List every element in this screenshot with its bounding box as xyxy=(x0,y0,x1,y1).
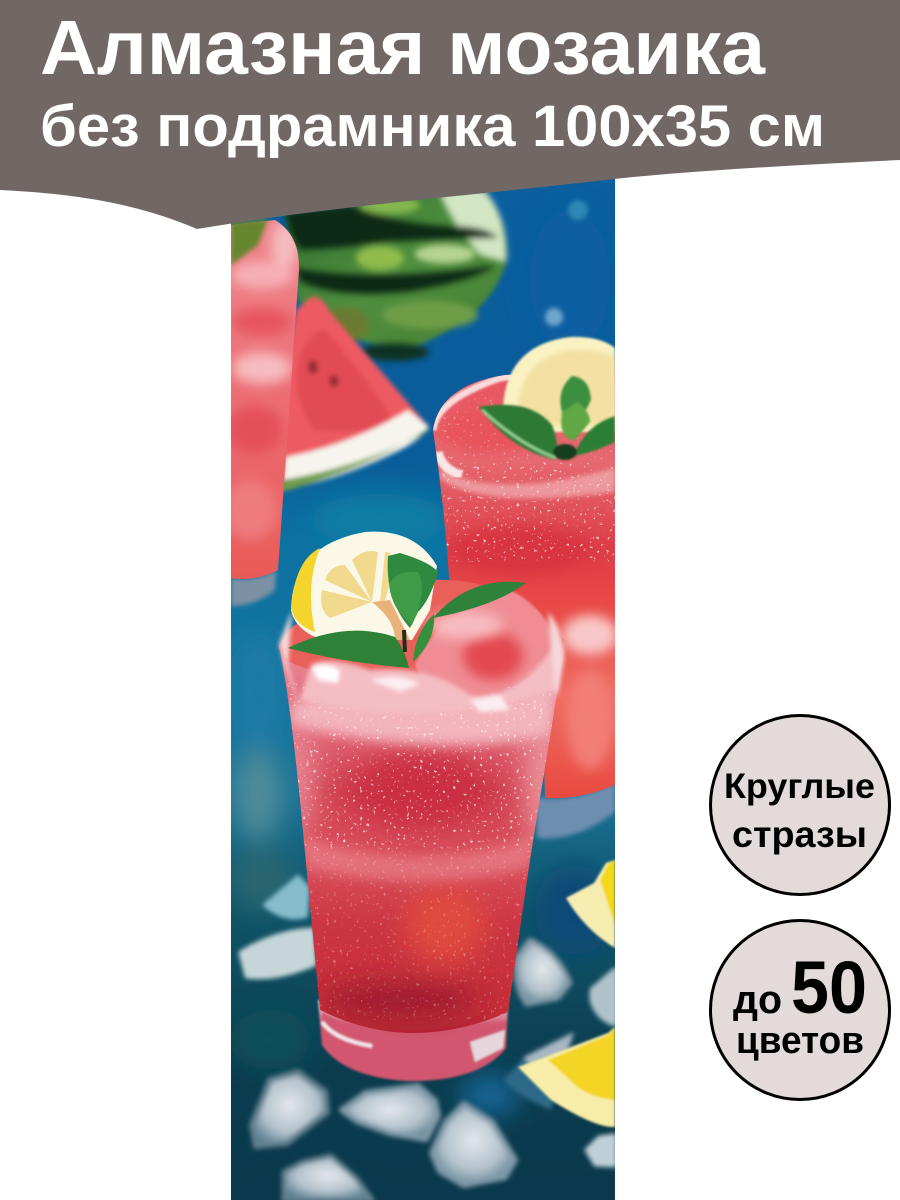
photo background: blue table xyxy=(231,170,615,1200)
left glass xyxy=(231,218,300,609)
whole watermelon xyxy=(285,188,506,361)
ice cubes behind glass xyxy=(241,877,615,1024)
badge: up to 50 colours: до xyxy=(733,978,782,1022)
lemon wedges xyxy=(518,860,615,1127)
title line 1: Алмазная мозаика xyxy=(40,5,766,91)
badge: round rhinestones xyxy=(710,716,890,894)
badge: round rhinestones: Круглые xyxy=(724,767,875,806)
header banner xyxy=(0,0,900,229)
badge: up to 50 colours: 50 xyxy=(791,946,867,1029)
badge: round rhinestones: стразы xyxy=(732,814,867,855)
product photo: watermelon slushie glasses xyxy=(222,170,620,1200)
table colour patches xyxy=(231,488,604,1127)
watermelon slice xyxy=(281,297,429,492)
slush top and frosted rim xyxy=(279,580,564,713)
main glass body xyxy=(279,645,564,1033)
main mint xyxy=(288,553,526,668)
main glass base xyxy=(318,1000,508,1081)
bokeh dots xyxy=(545,200,588,326)
ice cubes in front xyxy=(252,1032,615,1200)
badge: up to 50 colours: цветов xyxy=(736,1020,864,1062)
right lemon xyxy=(503,337,615,432)
title line 2: без подрамника 100х35 см xyxy=(40,94,825,159)
right mint xyxy=(479,376,615,460)
main lemon xyxy=(291,532,437,640)
badge: up to 50 colours xyxy=(710,920,890,1100)
right glass body xyxy=(430,365,620,838)
